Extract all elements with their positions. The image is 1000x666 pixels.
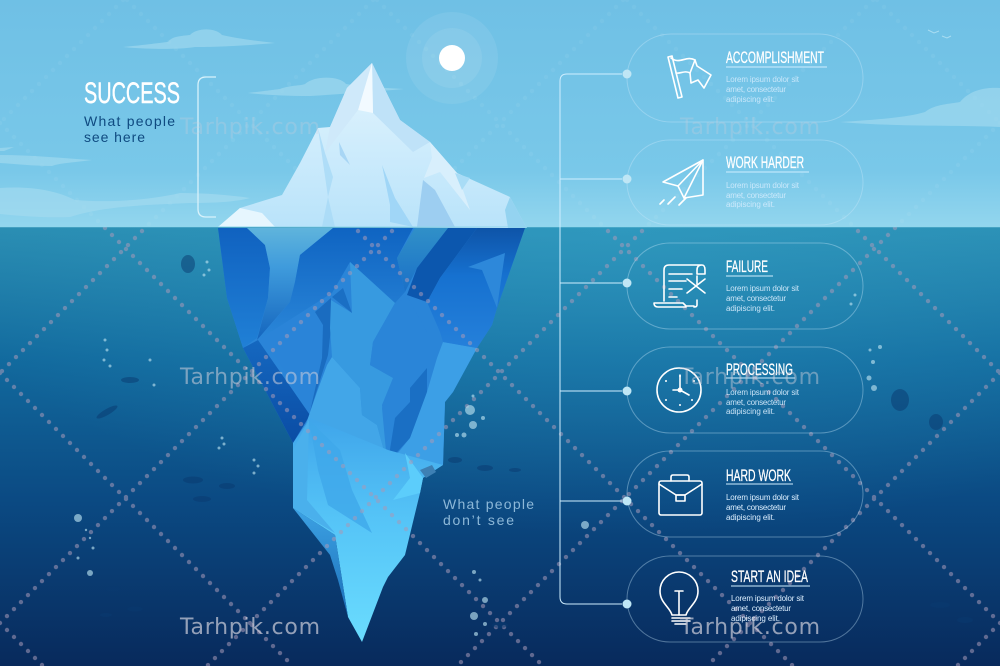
watermarks: Tarhpik.com	[679, 615, 820, 640]
panel: accomplishment	[622, 34, 863, 122]
bubbles	[74, 260, 882, 636]
panel: work harder	[622, 140, 863, 225]
heading: WORK HARDER	[726, 153, 804, 172]
fish silhouettes	[95, 255, 973, 628]
panel: start an idea	[622, 556, 863, 642]
sun	[406, 12, 498, 104]
sea background	[0, 227, 1000, 666]
watermarks: Tarhpik.com	[679, 365, 820, 390]
body text: Lorem ipsum dolor sit	[726, 493, 800, 502]
body text: amet, consectetur	[731, 604, 791, 613]
body text: Lorem ipsum dolor sit	[726, 75, 800, 84]
body text: adipiscing elit.	[726, 200, 775, 209]
body text: adipiscing elit.	[731, 614, 780, 623]
clouds	[0, 29, 1000, 217]
watermarks: Tarhpik.com	[179, 615, 320, 640]
heading: ACCOMPLISHMENT	[726, 48, 824, 67]
text: what people see here: see here	[84, 129, 145, 145]
body text	[726, 493, 800, 522]
body text: Lorem ipsum dolor sit	[731, 594, 805, 603]
body text: amet, consectetur	[726, 503, 786, 512]
body text: Lorem ipsum dolor sit	[726, 181, 800, 190]
body text	[726, 181, 800, 209]
body text: adipiscing elit.	[726, 304, 775, 313]
body text: Lorem ipsum dolor sit	[726, 284, 800, 293]
body text: amet, consectetur	[726, 398, 786, 407]
panel: processing	[622, 347, 863, 433]
icon: document with cross	[654, 265, 705, 307]
iceberg: above water	[218, 63, 527, 228]
heading: START AN IDEA	[731, 567, 808, 586]
body text	[731, 594, 805, 623]
heading: HARD WORK	[726, 466, 791, 485]
panel: hard work	[622, 451, 863, 537]
text: what people don't see: What people	[443, 496, 534, 512]
icon: briefcase	[659, 475, 702, 515]
text: what people see here: What people	[84, 113, 175, 129]
text: what people don't see	[443, 496, 534, 528]
watermarks: Tarhpik.com	[679, 115, 820, 140]
icon: light bulb	[660, 572, 698, 624]
icon: flag	[668, 56, 711, 98]
birds	[928, 30, 951, 38]
text: what people don't see: don’t see	[443, 512, 514, 528]
iceberg	[218, 63, 527, 642]
sky background	[0, 0, 1000, 228]
body text	[726, 284, 800, 313]
heading: FAILURE	[726, 257, 768, 276]
body text: amet, consectetur	[726, 85, 786, 94]
success heading: SUCCESS	[84, 77, 180, 110]
watermarks: Tarhpik.com	[179, 365, 320, 390]
body text: adipiscing elit.	[726, 95, 775, 104]
watermarks: Tarhpik.com	[179, 115, 320, 140]
body text: adipiscing elit.	[726, 513, 775, 522]
watermarks	[179, 115, 820, 640]
dotted lattice in water	[0, 227, 1000, 666]
body text: amet, consectetur	[726, 294, 786, 303]
iceberg: below water	[218, 228, 525, 642]
icon: paper plane	[660, 160, 703, 205]
body text	[726, 75, 800, 104]
heading: PROCESSING	[726, 360, 793, 379]
bracket: success	[198, 77, 216, 217]
connector lines	[560, 74, 622, 604]
body text: Lorem ipsum dolor sit	[726, 388, 800, 397]
body text	[726, 388, 800, 416]
waterline highlight	[0, 226, 1000, 228]
body text: amet, consectetur	[726, 191, 786, 200]
text: what people see here	[84, 113, 175, 145]
icon: clock	[657, 368, 701, 412]
body text: adipiscing elit.	[726, 407, 775, 416]
panel: failure	[622, 243, 863, 329]
